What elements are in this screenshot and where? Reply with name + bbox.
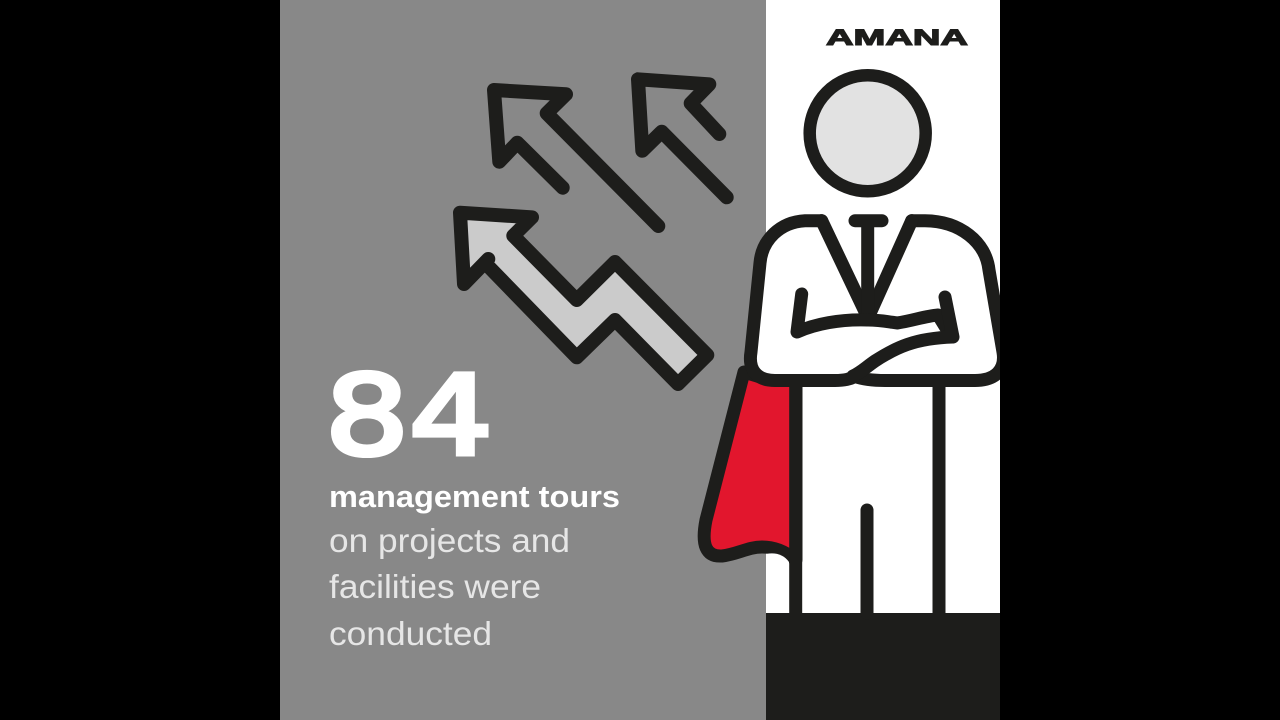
text block: description: [329, 479, 620, 652]
torso outline: [750, 221, 1003, 380]
folded arm lower: [853, 297, 953, 376]
white patch below cape: [766, 553, 789, 563]
text: conducted: conducted: [329, 615, 492, 652]
text: facilities were: facilities were: [329, 568, 541, 605]
folded arm upper: [797, 294, 946, 332]
tie: [855, 221, 882, 320]
arrow group: three rising arrows: [460, 79, 727, 384]
arrow: upper left outline: [494, 90, 658, 226]
text: management tours: management tours: [329, 479, 620, 514]
trousers: [796, 380, 939, 613]
left leg line: [789, 380, 802, 613]
panel: dark floor: [766, 613, 1000, 720]
cape: [704, 372, 796, 560]
right leg line: [932, 380, 946, 613]
inner leg line: [860, 510, 874, 613]
head: [810, 75, 926, 191]
text: on projects and: on projects and: [329, 522, 570, 559]
stat: 84: 84: [325, 352, 493, 480]
arrow: upper right outline: [638, 79, 727, 197]
logo: AMANA: AMANA: [826, 25, 968, 50]
panel: white background: [766, 0, 1000, 720]
figure: businessman with red cape: [704, 75, 1003, 613]
panel: grey background: [280, 0, 766, 720]
lapels: [822, 221, 912, 318]
arrow: lower zigzag filled: [460, 213, 707, 384]
